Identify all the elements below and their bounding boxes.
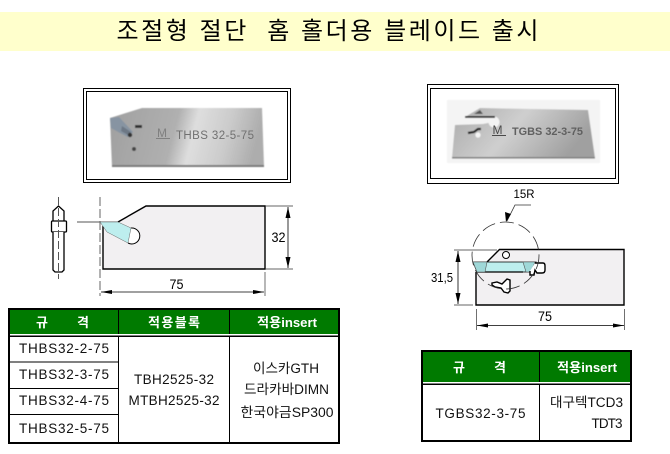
table header: 규 — [453, 360, 465, 375]
photo: THBS blade: M — [157, 126, 167, 140]
applicable inserts: 이스카GTH — [253, 361, 319, 376]
title banner: 조절형 절단 홈 홀더용 블레이드 출시 — [116, 18, 538, 45]
title banner — [0, 12, 670, 51]
drawing: THBS front view with dimensions — [100, 197, 293, 296]
drawing: THBS side view — [52, 197, 140, 279]
table: THBS specifications — [9, 309, 339, 443]
drawing: TGBS front view with dimensions: 15R — [514, 187, 535, 201]
table header: 적용insert — [257, 315, 318, 330]
specification codes: THBS32-5-75 — [19, 421, 109, 436]
table header: 적용블록 — [148, 315, 200, 330]
table header — [423, 352, 630, 385]
drawing: THBS front view with dimensions: 32 — [272, 230, 286, 245]
specification code: TGBS32-3-75 — [436, 406, 526, 421]
drawing: TGBS front view with dimensions: 75 — [538, 309, 552, 324]
drawing: TGBS front view with dimensions: 31,5 — [431, 270, 453, 285]
applicable insert: TDT3 — [592, 416, 622, 431]
photo: TGBS blade: TGBS 32-3-75 — [512, 126, 583, 138]
applicable blocks — [128, 372, 220, 408]
photo: TGBS blade — [428, 84, 618, 184]
applicable inserts: 한국야금SP300 — [240, 405, 334, 420]
photo: THBS blade: THBS 32-5-75 — [176, 130, 254, 142]
table header — [10, 310, 338, 337]
table header: 격 — [77, 315, 89, 330]
applicable inserts — [240, 361, 334, 420]
specification codes — [19, 341, 109, 436]
photo: TGBS blade: M — [492, 123, 502, 137]
specification codes: THBS32-4-75 — [19, 393, 109, 408]
specification codes: THBS32-2-75 — [19, 341, 109, 356]
applicable blocks: MTBH2525-32 — [128, 393, 220, 408]
applicable inserts: 드라카바DIMN — [244, 382, 329, 397]
applicable insert — [550, 395, 623, 431]
applicable blocks: TBH2525-32 — [134, 372, 214, 387]
applicable insert: 대구텍TCD3 — [550, 395, 623, 410]
table header: 격 — [494, 360, 506, 375]
table header: 규 — [36, 315, 48, 330]
table: TGBS specifications — [422, 351, 631, 441]
specification codes: THBS32-3-75 — [19, 367, 109, 382]
drawing: TGBS front view with dimensions — [431, 187, 624, 330]
table header: 적용insert — [557, 360, 618, 375]
drawing: THBS front view with dimensions: 75 — [170, 277, 184, 292]
photo: THBS blade — [84, 88, 290, 182]
